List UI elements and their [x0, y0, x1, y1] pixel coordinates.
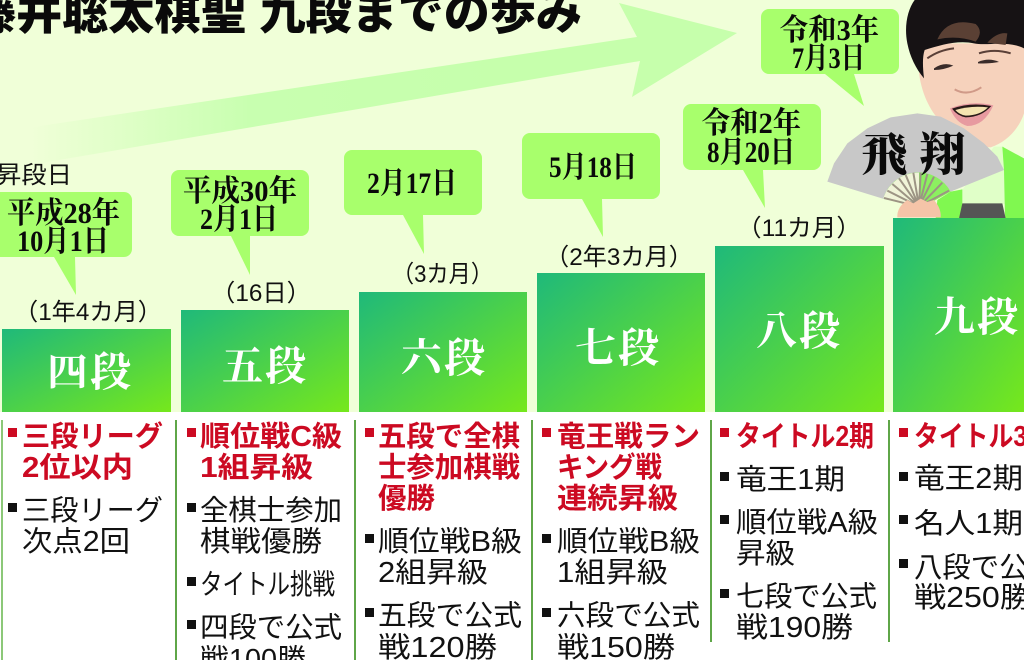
column: 六段 conditions: 2組昇級 [378, 557, 488, 589]
column: 七段 conditions: 竜王戦ラン [557, 421, 700, 453]
column: 七段 conditions: キング戦 [557, 451, 662, 484]
arrow: rising progress [0, 3, 737, 170]
illustration: portrait with fan [827, 0, 1024, 218]
duration: 16日: （16日） [211, 280, 311, 307]
hair highlight [937, 22, 1007, 45]
bar: 九段: 九段 [934, 294, 1018, 340]
column: 五段 conditions: 順位戦C級 [200, 421, 342, 453]
callout: godan date: 平成30年 [183, 175, 297, 208]
fan [827, 113, 1004, 208]
column: 六段 conditions: 五段で全棋 [378, 421, 520, 453]
column: 五段 conditions [175, 420, 342, 660]
bar: 五段 [181, 310, 349, 412]
column: 六段 conditions: 五段で公式 [378, 600, 522, 632]
callout: kudan date: 令和3年 [780, 14, 879, 47]
callout: hachidan date: 令和2年 [702, 107, 801, 140]
bar: 七段: 七段 [575, 325, 659, 371]
callout: shodan date: 10月1日 [17, 225, 109, 258]
callout: kudan date [761, 9, 899, 106]
column: 八段 conditions: 竜王1期 [736, 464, 845, 496]
column: 五段 conditions: 四段で公式 [200, 612, 342, 644]
bar: 四段 [2, 329, 171, 412]
column: 四段 conditions: 三段リーグ [22, 495, 163, 527]
column: 四段 conditions: 次点2回 [22, 526, 130, 558]
bar: 六段: 六段 [401, 335, 485, 381]
column: 六段 conditions: 優勝 [378, 483, 435, 515]
column: 四段 conditions: 2位以内 [22, 452, 133, 484]
duration: 2年3カ月: （2年3カ月） [545, 244, 693, 271]
face [919, 43, 1024, 147]
callout: rokudan date: 2月17日 [367, 167, 457, 200]
body: green kimono [936, 147, 1024, 218]
column: 八段 conditions: 昇級 [736, 538, 795, 570]
bar: 六段 [359, 292, 527, 412]
hand [897, 199, 941, 217]
bar: 八段: 八段 [756, 308, 840, 354]
callout: shodan date [0, 192, 132, 295]
callout: shodan date: 平成28年 [7, 197, 120, 230]
callout: godan date: 2月1日 [200, 203, 278, 236]
column: 九段 conditions [888, 420, 1024, 642]
column: 九段 conditions: 戦250勝 [914, 582, 1024, 614]
column: 七段 conditions [531, 420, 700, 660]
callout: hachidan date [683, 104, 821, 208]
column: 七段 conditions: 連続昇級 [557, 483, 678, 515]
column: 七段 conditions: 順位戦B級 [557, 526, 700, 558]
hair [906, 0, 1024, 78]
callout: hachidan date: 8月20日 [707, 136, 795, 169]
column: 七段 conditions: 1組昇級 [557, 557, 668, 589]
column: 六段 conditions: 順位戦B級 [378, 526, 522, 558]
duration: 3カ月: （3カ月） [392, 261, 493, 288]
column: 五段 conditions: タイトル挑戦 [200, 569, 335, 601]
fan: 飛翔 [861, 119, 965, 185]
callout: nanadan date [522, 133, 660, 237]
callout: nanadan date: 5月18日 [549, 151, 637, 184]
callout: rokudan date [344, 150, 482, 254]
bar: 五段: 五段 [222, 343, 306, 389]
callout: godan date [171, 170, 309, 275]
column: 五段 conditions: 全棋士参加 [200, 495, 342, 527]
column: 九段 conditions: 名人1期 [914, 508, 1023, 540]
column: 八段 conditions [710, 420, 878, 644]
column: 八段 conditions: 戦190勝 [736, 612, 853, 644]
column: 四段 conditions: 三段リーグ [22, 420, 163, 453]
column: 八段 conditions: 順位戦A級 [736, 507, 878, 539]
duration: 1年4カ月: （1年4カ月） [14, 299, 162, 326]
column: 七段 conditions: 六段で公式 [557, 600, 700, 632]
column: 八段 conditions: 七段で公式 [736, 581, 877, 613]
column: 五段 conditions: 棋戦優勝 [200, 526, 322, 558]
column: 八段 conditions: タイトル2期 [736, 421, 874, 453]
duration: 11カ月: （11カ月） [737, 215, 861, 242]
bar: 七段 [537, 273, 705, 412]
column: 四段 conditions [1, 420, 163, 660]
bar: 八段 [715, 246, 884, 412]
column: 五段 conditions: 1組昇級 [200, 452, 313, 484]
column: 六段 conditions: 士参加棋戦 [378, 452, 520, 484]
callout: kudan date: 7月3日 [792, 42, 865, 75]
column: 六段 conditions [354, 420, 522, 660]
column: 九段 conditions: 竜王2期 [914, 463, 1023, 495]
bar: 四段: 四段 [47, 349, 131, 395]
bar: 九段 [893, 218, 1024, 412]
